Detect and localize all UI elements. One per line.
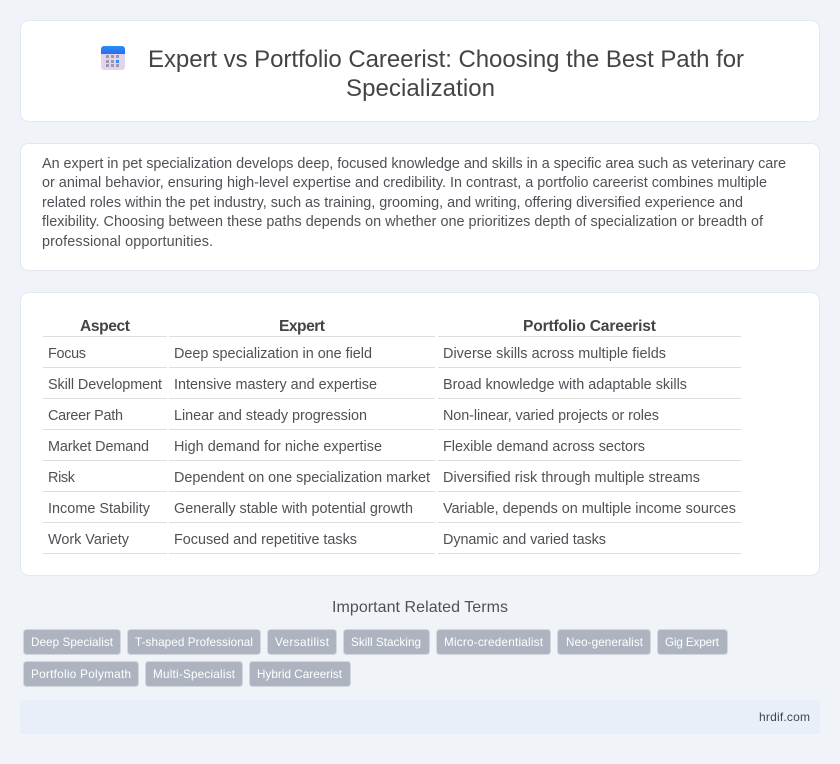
- row: focus: [48, 346, 666, 362]
- tags: related terms: [24, 630, 728, 686]
- text block: introduction: related roles within the pet industry, such as training, grooming, and writing, offering diversified experience and: [42, 195, 743, 211]
- row: skill development: [48, 377, 687, 393]
- panel: comparison table: [20, 292, 820, 576]
- row: skill development: Skill Development: [48, 377, 162, 393]
- row: work variety: Focused and repetitive tasks: [174, 532, 357, 548]
- table header: Portfolio Careerist: [523, 318, 656, 335]
- row: work variety: Work Variety: [48, 532, 130, 548]
- row: focus: Diverse skills across multiple fields: [443, 346, 666, 362]
- tags: related terms: Portfolio Polymath: [31, 668, 131, 681]
- row: work variety: Dynamic and varied tasks: [443, 532, 606, 548]
- footer: hrdif.com: [759, 710, 810, 724]
- heading: important related terms: Important Related Terms: [332, 599, 508, 616]
- row: skill development: Intensive mastery and expertise: [174, 377, 377, 393]
- footer: [20, 700, 820, 734]
- table header: [80, 318, 656, 335]
- row: career path: [48, 408, 659, 424]
- icon: calendar: [101, 46, 125, 70]
- tags: related terms: T-shaped Professional: [135, 636, 253, 649]
- table header: Aspect: [80, 318, 130, 335]
- title: Specialization: [346, 75, 495, 102]
- row: career path: Career Path: [48, 408, 123, 424]
- tags: related terms: Deep Specialist: [31, 636, 114, 649]
- row: market demand: High demand for niche expertise: [174, 439, 382, 455]
- tags: related terms: Micro-credentialist: [444, 636, 544, 649]
- row: income stability: Income Stability: [48, 501, 151, 517]
- row: work variety: [48, 532, 606, 548]
- table header: Expert: [279, 318, 325, 335]
- tags: related terms: Gig Expert: [665, 636, 720, 649]
- tags: related terms: Multi-Specialist: [153, 668, 236, 681]
- title: Expert vs Portfolio Careerist: Choosing the Best Path for: [148, 46, 744, 73]
- tags: related terms: Skill Stacking: [351, 636, 421, 649]
- row: market demand: [48, 439, 645, 455]
- text block: introduction: flexibility. Choosing between these paths depends on whether one prioritizes depth of specialization or breadth of: [42, 214, 764, 230]
- row: risk: [48, 470, 700, 486]
- title: [148, 46, 744, 102]
- row: risk: Diversified risk through multiple streams: [443, 470, 700, 486]
- row: market demand: Market Demand: [48, 439, 149, 455]
- row: focus: Deep specialization in one field: [174, 346, 372, 362]
- row: risk: Dependent on one specialization market: [174, 470, 430, 486]
- tags: related terms: Versatilist: [275, 636, 330, 649]
- row: market demand: Flexible demand across sectors: [443, 439, 645, 455]
- row: income stability: Variable, depends on multiple income sources: [443, 501, 736, 517]
- panel: introduction: [20, 144, 820, 270]
- row: focus: Focus: [48, 346, 86, 362]
- panel: header: [20, 20, 820, 122]
- row: income stability: Generally stable with potential growth: [174, 501, 413, 517]
- row: career path: Linear and steady progression: [174, 408, 367, 424]
- row: risk: Risk: [48, 470, 76, 486]
- text block: introduction: or animal behavior, ensuring high-level expertise and credibility. In contrast, a portfolio careerist combines multiple: [42, 175, 767, 191]
- row: career path: Non-linear, varied projects or roles: [443, 408, 659, 424]
- text block: introduction: An expert in pet specialization develops deep, focused knowledge and skills in a specific area such as veterinary care: [42, 156, 786, 172]
- row: income stability: [48, 501, 736, 517]
- tags: related terms: Hybrid Careerist: [257, 668, 343, 681]
- tags: related terms: Neo-generalist: [566, 636, 644, 649]
- row: skill development: Broad knowledge with adaptable skills: [443, 377, 687, 393]
- text block: introduction: professional opportunities.: [42, 234, 213, 250]
- text block: introduction: [42, 156, 786, 250]
